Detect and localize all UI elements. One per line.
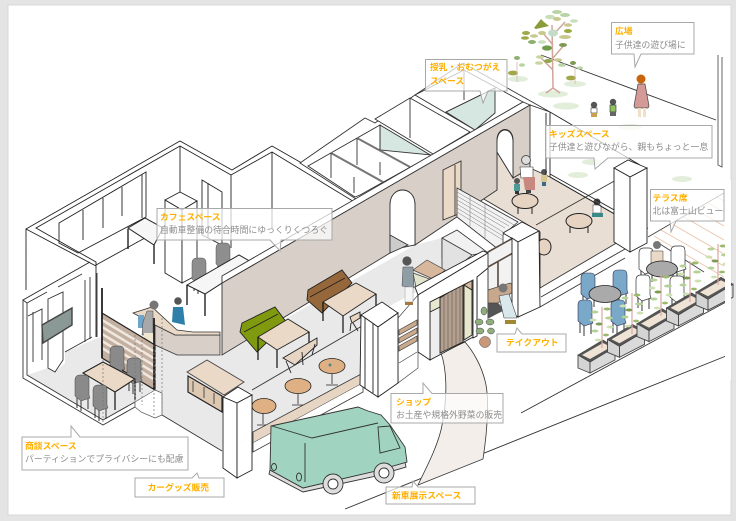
callout: テラス席 xyxy=(650,190,724,232)
product shelf xyxy=(413,273,435,294)
person xyxy=(402,256,414,305)
floor patch xyxy=(135,390,162,418)
plaza figures xyxy=(591,74,649,117)
wheels xyxy=(323,474,343,494)
ground lines xyxy=(345,55,726,509)
mint floor middle xyxy=(380,125,432,167)
callout: 授乳・おむつがえスペース xyxy=(426,60,507,103)
callout: カフェスペース: 自動車整備の待合時間にゆっくりくつろぐ xyxy=(160,224,328,235)
body lines xyxy=(272,423,378,482)
tree trunk xyxy=(540,22,565,93)
child left xyxy=(591,102,597,117)
lower ledge xyxy=(253,383,363,452)
vertical corners xyxy=(180,146,272,248)
child right xyxy=(610,99,616,116)
callout: ショップ: ショップ xyxy=(396,397,431,407)
callout: 広場: 子供達の遊び場に xyxy=(615,39,686,50)
slatted door xyxy=(440,283,463,353)
potted plant xyxy=(475,307,494,348)
callout: 新車展示スペース xyxy=(386,481,475,504)
meeting set xyxy=(75,346,142,421)
callout: テイクアウト xyxy=(497,328,566,352)
kids space floor xyxy=(482,152,625,288)
callout: キッズスペース: 子供達と遊びながら、親もちょっと一息 xyxy=(549,141,708,152)
pillar left xyxy=(223,387,252,478)
column xyxy=(165,192,197,283)
callout: カフェスペース: カフェスペース xyxy=(160,212,221,222)
callout: テラス席: テラス席 xyxy=(652,192,688,203)
mint floor far xyxy=(446,88,495,130)
callout: カフェスペース xyxy=(157,208,332,251)
middle room xyxy=(375,98,470,154)
callout: カーグッズ販売 xyxy=(135,473,224,497)
callout: 商談スペース: パーティションでプライバシーにも配慮 xyxy=(25,453,184,464)
left wall lines xyxy=(23,228,163,337)
table xyxy=(83,362,135,392)
far room corner xyxy=(463,70,465,100)
floor front edge xyxy=(162,326,362,451)
small rooms xyxy=(308,125,432,197)
opening interior xyxy=(430,277,477,360)
callout: ショップ: お土産や規格外野菜の販売 xyxy=(396,409,502,420)
callout: 広場: 広場 xyxy=(615,25,633,36)
windows xyxy=(59,172,146,253)
callout: テラス席: 北は富士山ビュー xyxy=(652,205,723,216)
wall top band xyxy=(222,102,530,283)
green sofa set xyxy=(240,307,317,373)
window xyxy=(378,426,400,453)
child teal xyxy=(514,178,520,194)
staff person xyxy=(172,297,185,325)
right margin cover xyxy=(725,180,731,380)
callout: キッズスペース xyxy=(546,126,712,169)
right opening shelf xyxy=(464,285,472,340)
door xyxy=(202,180,222,245)
brown sofa set xyxy=(307,270,376,333)
callout: 授乳・おむつがえスペース: スペース xyxy=(430,76,464,86)
shop shelf xyxy=(187,360,244,412)
terrace: blue chairs and table xyxy=(578,270,628,336)
lattice wall xyxy=(457,188,518,253)
callout: 広場 xyxy=(612,22,694,67)
left lower room floor xyxy=(27,337,153,420)
kids tables xyxy=(512,194,592,255)
counter staff xyxy=(138,297,185,342)
seated child xyxy=(592,198,603,217)
callout: 新車展示スペース: 新車展示スペース xyxy=(392,490,462,500)
kids figures xyxy=(514,156,603,217)
right wall pillar xyxy=(546,112,647,252)
corner table xyxy=(128,218,163,264)
callout: キッズスペース: キッズスペース xyxy=(549,128,610,139)
terrace outline xyxy=(626,193,724,272)
TV monitor xyxy=(42,308,72,343)
callout: 商談スペース xyxy=(22,426,188,470)
seated person xyxy=(651,241,663,263)
callout: ショップ xyxy=(391,383,503,423)
walls: cafe upper rooms xyxy=(23,141,363,337)
pillar right xyxy=(503,222,540,317)
callout: カーグッズ販売: カーグッズ販売 xyxy=(148,482,209,492)
upper rooms xyxy=(300,63,550,217)
takeout staff person xyxy=(498,284,517,324)
caregiver xyxy=(520,156,535,193)
arch left floor xyxy=(390,235,408,253)
arch left xyxy=(390,190,415,250)
pale shelf left xyxy=(430,297,440,312)
terrace hatch xyxy=(654,197,724,277)
far room xyxy=(415,70,523,130)
driveway path xyxy=(418,342,488,485)
pillar center xyxy=(360,302,398,397)
tree leaves xyxy=(508,10,583,84)
gate wall xyxy=(415,251,488,360)
callout: 授乳・おむつがえスペース: 授乳・おむつがえ xyxy=(430,61,501,72)
counter block xyxy=(442,230,487,258)
planters xyxy=(578,244,733,373)
mother xyxy=(634,74,649,117)
rooms white top xyxy=(300,63,550,217)
beige wall xyxy=(222,102,530,355)
terrace: white chairs and table xyxy=(636,241,686,312)
counter block front xyxy=(442,238,472,280)
kids table 1 xyxy=(512,194,538,214)
truck xyxy=(269,407,407,494)
cafe counter xyxy=(133,307,220,355)
shop shelves xyxy=(398,295,418,383)
kids floor seam xyxy=(536,175,625,225)
main floor xyxy=(155,238,442,451)
ground shrubs xyxy=(508,76,692,182)
kids table 3 xyxy=(537,239,551,255)
callout: 商談スペース: 商談スペース xyxy=(25,440,77,451)
gate front xyxy=(418,253,488,360)
cafe tables xyxy=(128,218,253,316)
truck skirt xyxy=(269,462,406,492)
wall: lower left room xyxy=(23,273,135,425)
takeout window xyxy=(488,238,518,318)
long table xyxy=(187,243,253,316)
customer xyxy=(138,300,158,342)
kids table 2 xyxy=(566,214,592,233)
garden: tree and shrubs xyxy=(508,10,692,182)
truck body xyxy=(270,407,407,488)
child beige xyxy=(541,169,547,186)
shop person xyxy=(402,256,445,305)
wooden door xyxy=(443,161,461,220)
gate top beam xyxy=(415,251,488,295)
brown ledge xyxy=(253,373,363,443)
wall top band xyxy=(26,141,363,266)
arch right xyxy=(497,130,513,178)
slatted partition xyxy=(102,288,155,390)
dashed guide xyxy=(103,318,162,425)
round tables xyxy=(252,358,345,425)
callout: テイクアウト: テイクアウト xyxy=(506,338,559,348)
